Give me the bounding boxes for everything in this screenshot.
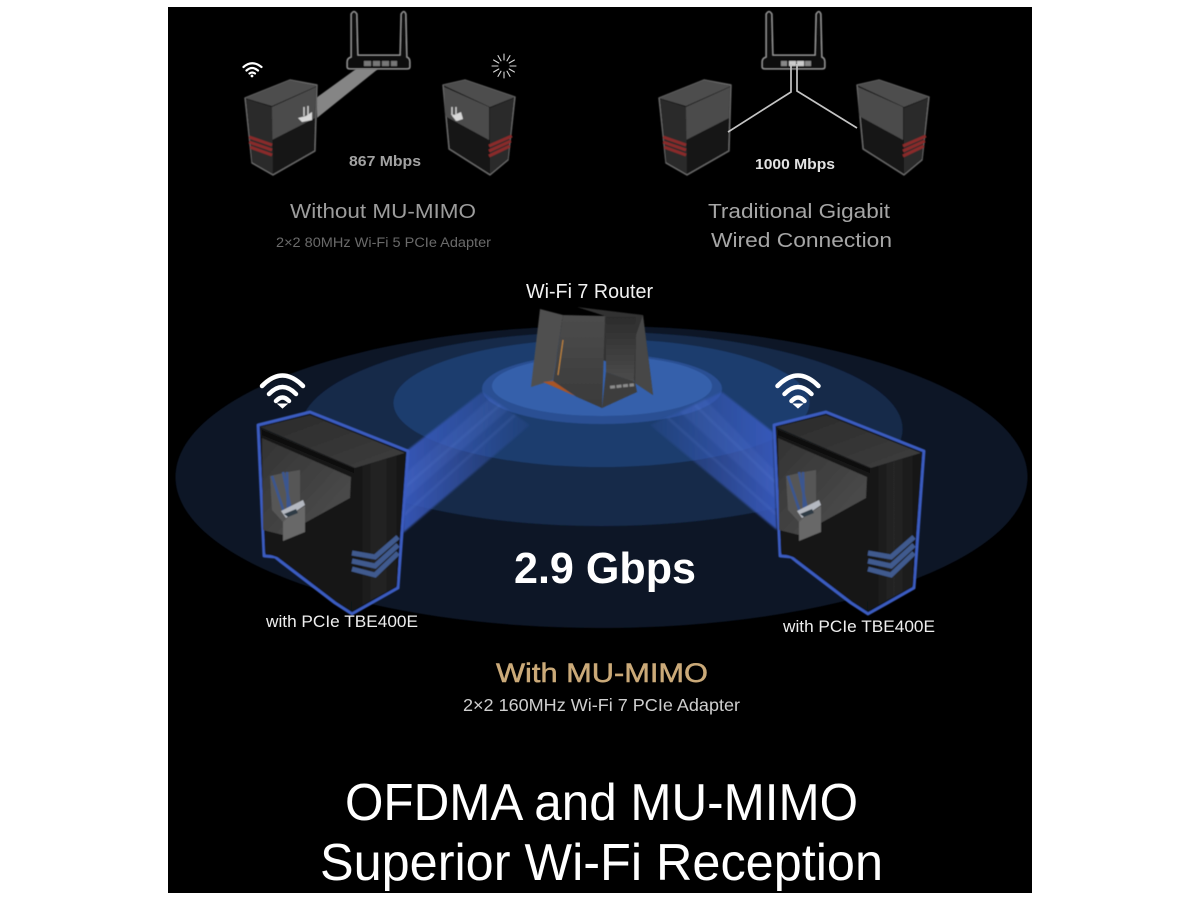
router label: Wi-Fi 7 Router: [526, 281, 653, 303]
title: OFDMA and MU-MIMO: [345, 774, 858, 832]
speed label: 1000 Mbps: 1000 Mbps: [755, 156, 835, 173]
heading: With MU-MIMO: With MU-MIMO: [496, 658, 708, 688]
icon: wifi signal: [244, 63, 262, 77]
heading: Without MU-MIMO: Without MU-MIMO: [290, 200, 476, 223]
signal beam: router to right PC: [650, 392, 777, 530]
ethernet wires: [728, 64, 857, 132]
left PC tower: [258, 412, 408, 614]
Wi-Fi 7 router: [531, 307, 653, 408]
left PC tower: [659, 80, 731, 175]
icon: signal burst: [492, 54, 516, 78]
title: Superior Wi-Fi Reception: [320, 834, 883, 892]
panel: traditional gigabit wired connection: [659, 12, 929, 252]
speed label: 2.9 Gbps: 2.9 Gbps: [514, 544, 696, 593]
right PC tower: [443, 80, 515, 175]
subheading: Wi-Fi 5 adapter: 2×2 80MHz Wi-Fi 5 PCIe Adapter: [276, 235, 492, 250]
signal beam: router to left PC: [403, 392, 530, 533]
heading: Traditional Gigabit Wired Connection: Wired Connection: [711, 229, 892, 252]
panel: with MU-MIMO coverage diagram: [176, 281, 1028, 715]
title: [320, 774, 883, 892]
speed label: 867 Mbps: 867 Mbps: [349, 153, 421, 170]
router with antennas: [762, 12, 825, 69]
right PC tower: [857, 80, 929, 175]
left PC tower: [245, 80, 317, 175]
icon: wifi left: [262, 376, 303, 408]
right PC caption: with PCIe TBE400E: [782, 617, 935, 636]
heading: Traditional Gigabit Wired Connection: [708, 200, 892, 252]
signal beam to left PC: [316, 69, 378, 118]
subheading: Wi-Fi 7 adapter: 2×2 160MHz Wi-Fi 7 PCIe Adapter: [463, 695, 740, 715]
left PC caption: with PCIe TBE400E: [265, 612, 418, 631]
coverage ellipses: [176, 326, 1028, 628]
right PC tower: [774, 412, 924, 614]
heading: Traditional Gigabit Wired Connection: Traditional Gigabit: [708, 200, 890, 223]
router with antennas: [347, 12, 410, 69]
black infographic panel: [168, 7, 1032, 893]
icon: wifi right: [778, 376, 818, 408]
panel: without MU-MIMO: [244, 12, 516, 250]
